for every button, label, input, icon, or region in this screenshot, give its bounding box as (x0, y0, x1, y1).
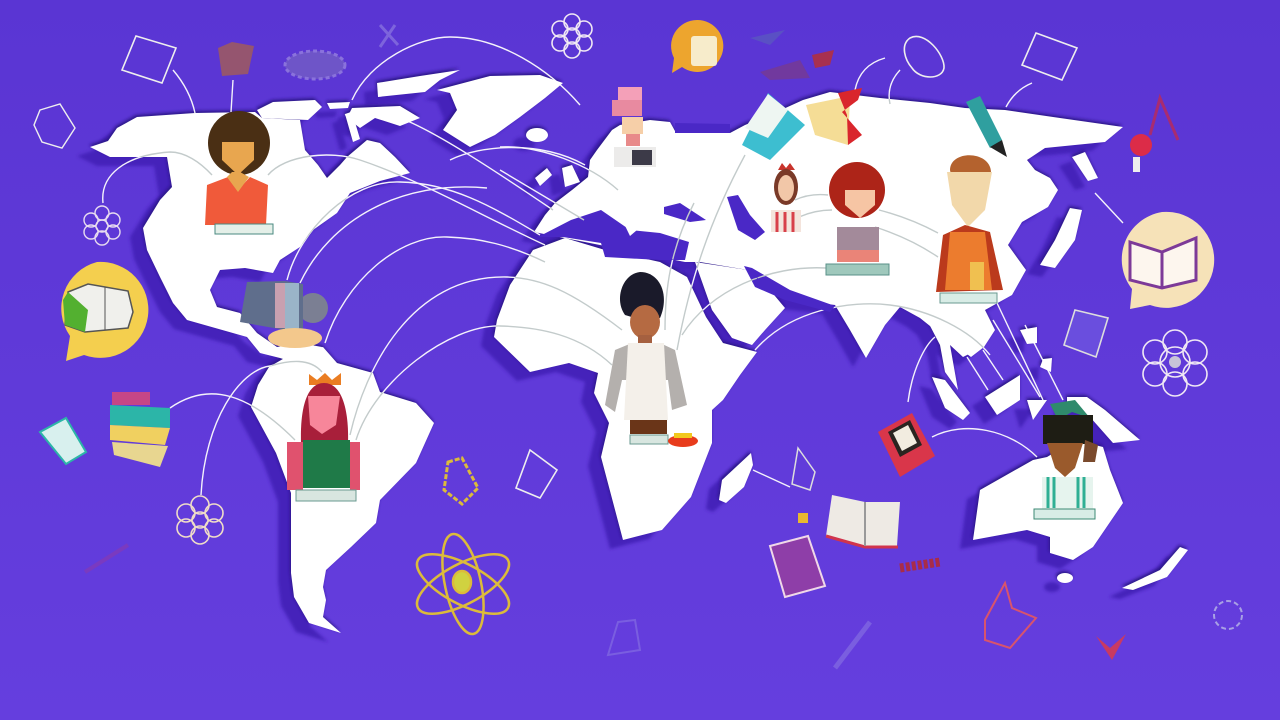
icon: notebook outline (1064, 310, 1108, 357)
new zealand (1122, 547, 1188, 590)
arctic island small (327, 102, 350, 109)
person: small figure, west asia (771, 163, 801, 232)
icon: faint pencil (835, 622, 870, 668)
sulawesi (1027, 400, 1047, 420)
speech bubble: yellow book, left (61, 262, 148, 361)
inland seas (538, 123, 835, 312)
speech bubble: orange top (671, 20, 723, 73)
connection lines on ocean (103, 37, 1123, 495)
south america (251, 347, 434, 633)
icon: pink doodle (985, 583, 1036, 648)
madagascar (719, 453, 753, 503)
icon: flower left (177, 496, 223, 544)
australia (973, 440, 1123, 560)
icon: note outline (122, 36, 176, 83)
icon: small yellow marker (798, 513, 808, 523)
arabia (695, 262, 785, 345)
japan (1040, 208, 1082, 268)
map coast edge (89, 68, 1187, 631)
italy (614, 203, 637, 236)
person: north america (205, 111, 273, 234)
icon: top dark doodles (750, 30, 834, 80)
british isles (535, 168, 552, 186)
icon: bag outline (792, 448, 815, 490)
icon: flower right (1143, 330, 1207, 396)
icon: pot outline (904, 36, 944, 77)
icon: red bulb and note (1130, 98, 1178, 172)
moluccas (1040, 358, 1052, 372)
icon: red book (878, 413, 935, 477)
icon: faint flower (1214, 601, 1242, 629)
icon: atom (409, 530, 517, 638)
icon: orange doodle (218, 42, 254, 76)
scotland (562, 165, 580, 187)
icon: red scribble (900, 562, 940, 568)
person: small figure, europe (612, 87, 656, 167)
icon: faint doodle (285, 51, 345, 79)
icon: flower top (552, 14, 592, 58)
icon: open book left (40, 418, 86, 464)
eurasia (534, 92, 1123, 358)
tasmania (1057, 573, 1073, 583)
person: africa (605, 272, 687, 444)
icon: book stack (110, 392, 170, 467)
sumatra (932, 377, 970, 420)
philippines (1020, 327, 1037, 344)
greenland north strip (377, 70, 460, 97)
icon: purple book (770, 536, 825, 597)
map shadow (77, 79, 1175, 642)
new guinea (1067, 397, 1140, 443)
person: east asia (936, 155, 1003, 303)
africa (494, 238, 757, 540)
baffin island (347, 106, 420, 128)
borneo (985, 375, 1020, 415)
icon: faint red scribble (85, 545, 128, 572)
person: south america (287, 373, 360, 501)
hudson strait island (345, 112, 360, 142)
icon: red check (1096, 634, 1126, 660)
icon: open book bottom (826, 495, 900, 547)
icon: faint flask (608, 620, 640, 655)
icon: grid card (516, 450, 557, 498)
arctic island west (257, 100, 322, 120)
person: australia (1034, 400, 1098, 519)
speech bubble: open book, right (1122, 212, 1214, 309)
icon: yellow doodle (444, 458, 478, 504)
person: central asia (826, 162, 889, 275)
world map (90, 70, 1188, 633)
greenland (437, 75, 563, 147)
iceland (526, 128, 548, 142)
icon: stamp outline (1022, 33, 1077, 80)
indochina (927, 320, 983, 390)
connection lines on land (139, 99, 984, 440)
icon: teal book top (742, 93, 805, 160)
north america (90, 112, 410, 366)
icon: small flower left (84, 206, 120, 245)
icon: scribble bag (34, 104, 75, 148)
icon: folder and flag (806, 88, 862, 145)
icon: marker pen (966, 96, 1007, 157)
icon: faint star (380, 25, 398, 47)
kamchatka (1072, 152, 1098, 181)
icon: toy boat (668, 433, 698, 447)
icon: book in caribbean (240, 281, 328, 348)
